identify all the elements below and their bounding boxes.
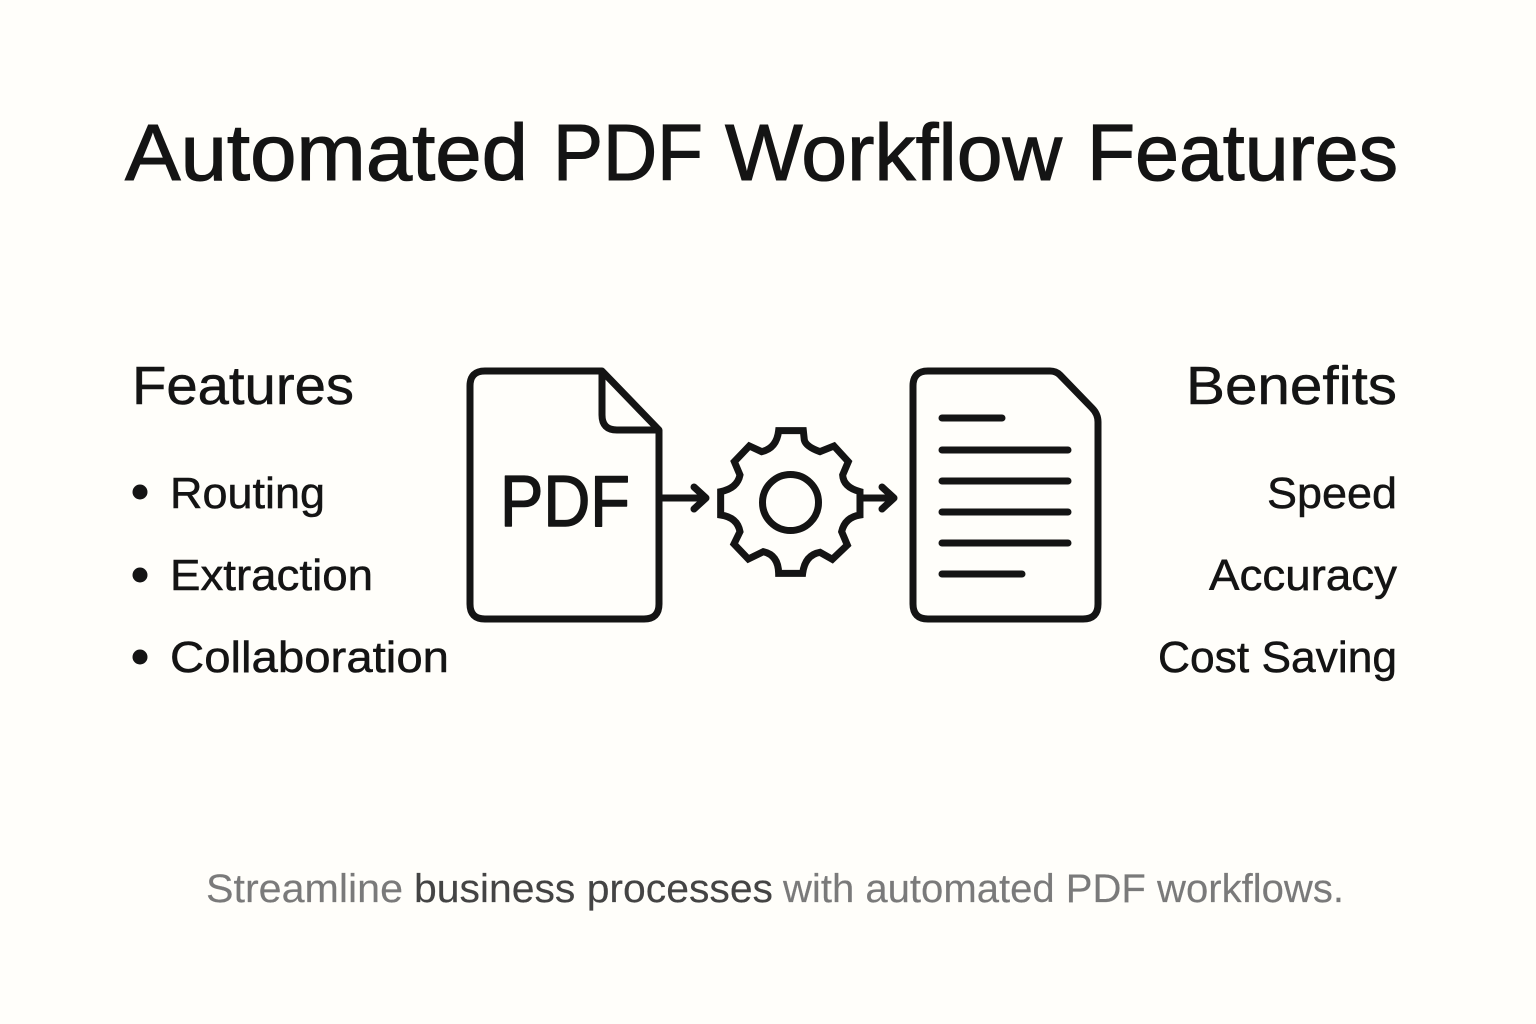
heading: features: Features [132, 356, 354, 416]
list item: extraction: Extraction [170, 551, 373, 600]
icon: pdf document [470, 371, 659, 619]
list item: routing: Routing [170, 469, 325, 518]
tagline: with automated PDF workflows. [782, 867, 1344, 911]
list item: accuracy: Accuracy [1209, 551, 1397, 600]
icon: pdf document: PDF [500, 462, 630, 542]
panel: benefits [1158, 356, 1397, 682]
tagline [206, 867, 1344, 911]
title [125, 108, 1398, 197]
icon: text document [913, 371, 1098, 619]
title: Features [1087, 108, 1398, 197]
title: Automated [125, 108, 528, 197]
title: Workflow [725, 108, 1062, 197]
icon: gear [721, 431, 860, 573]
tagline: business processes [414, 867, 773, 911]
arrow: pdf to gear [662, 487, 706, 509]
list item: collaboration: Collaboration [170, 633, 449, 682]
list item: cost saving: Cost Saving [1158, 633, 1397, 682]
panel: features [132, 356, 449, 682]
title: PDF [553, 108, 703, 197]
heading: benefits: Benefits [1186, 356, 1397, 416]
arrow: gear to document [862, 487, 894, 509]
tagline: Streamline [206, 867, 403, 911]
list item: speed: Speed [1267, 469, 1397, 518]
